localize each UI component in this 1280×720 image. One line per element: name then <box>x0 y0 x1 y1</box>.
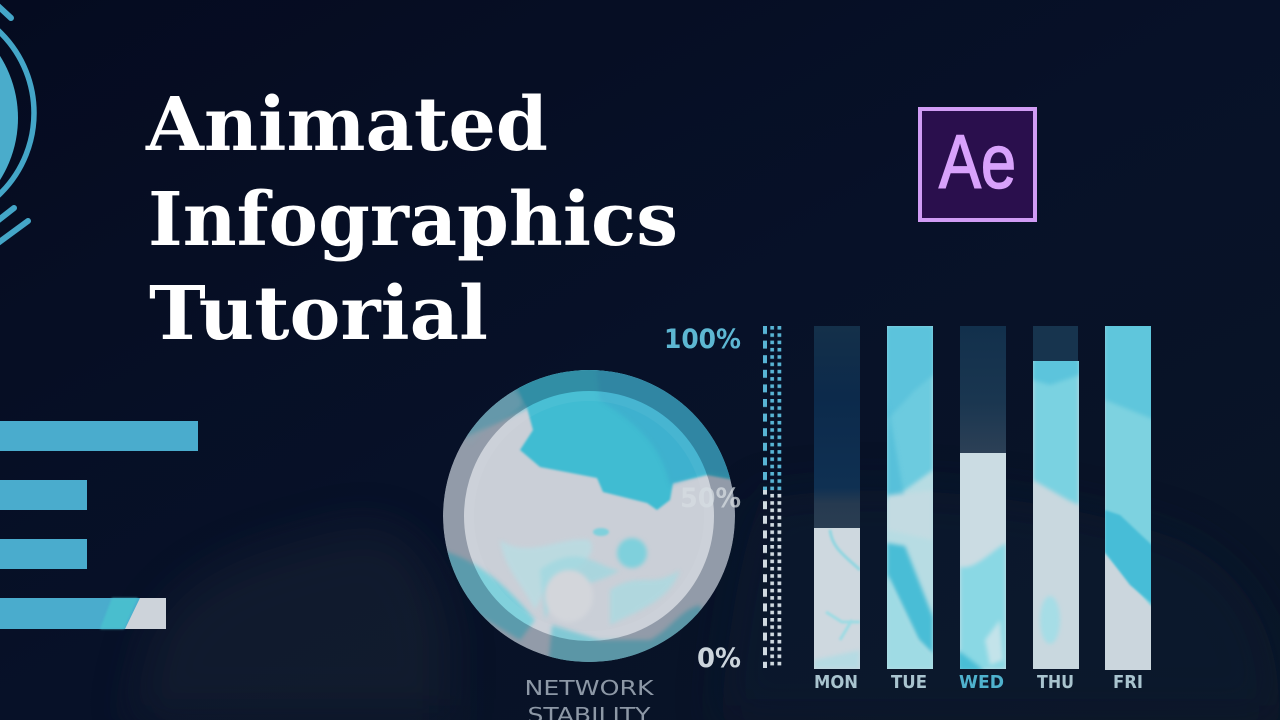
bar: Tuesday <box>887 326 933 669</box>
icon: After Effects logo <box>920 109 1035 220</box>
gauge bottom ticks <box>0 208 28 243</box>
bar: Monday <box>814 326 860 669</box>
donut texture <box>443 370 735 662</box>
axis labels <box>664 324 741 674</box>
title <box>145 82 678 357</box>
gauge disc <box>0 56 18 180</box>
100 percent: 100% <box>664 324 741 355</box>
label: THU: THU <box>1037 673 1074 693</box>
gauge outer ring <box>0 28 37 198</box>
label: TUE: TUE <box>891 673 927 693</box>
bar 4 <box>0 598 166 629</box>
bar: Friday <box>1105 322 1155 670</box>
bar 1 <box>0 421 198 451</box>
label: MON: MON <box>814 673 858 693</box>
bar: Thursday <box>1033 326 1079 669</box>
title line 3: Tutorial <box>149 271 488 357</box>
title line 2: Infographics <box>148 177 678 263</box>
vertical bar chart <box>814 322 1155 693</box>
label: network: NETWORK <box>524 676 655 700</box>
gauge top tick <box>0 6 11 18</box>
horizontal bar chart <box>0 421 198 629</box>
day labels <box>814 673 1143 693</box>
donut inner ring <box>528 391 706 476</box>
50 percent: 50% <box>680 483 741 514</box>
icon: partial radial gauge at left edge <box>0 0 34 243</box>
donut outer ring <box>454 380 724 652</box>
donut chart: network stability <box>430 360 745 720</box>
0 percent: 0% <box>697 643 741 674</box>
label: FRI: FRI <box>1113 673 1143 693</box>
bar 2 <box>0 480 87 510</box>
label: WED: WED <box>959 673 1004 693</box>
bar 3 <box>0 539 87 569</box>
dotted scale <box>763 326 781 668</box>
title line 1: Animated <box>145 82 548 168</box>
bar: Wednesday <box>958 326 1006 671</box>
icon: After Effects logo: Ae <box>939 120 1016 205</box>
